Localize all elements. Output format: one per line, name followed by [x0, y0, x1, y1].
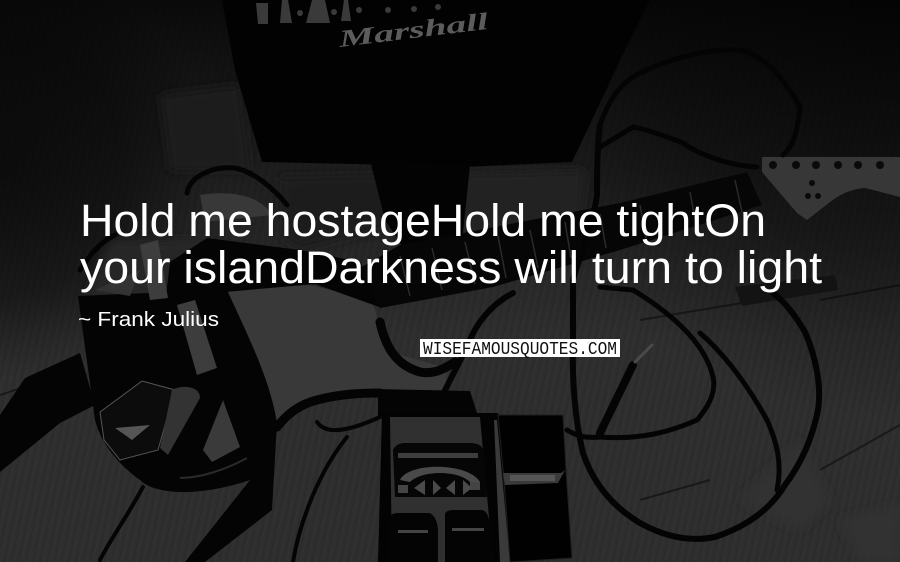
sticker badge on guitar [100, 381, 247, 478]
upper horn [165, 238, 382, 308]
quote text [80, 195, 823, 293]
guitar pickup [177, 300, 217, 375]
amp logo: Marshall [336, 9, 490, 53]
multi-effects pedal [378, 413, 510, 562]
quote text: your islandDarkness will turn to light [80, 242, 823, 293]
lower body [78, 290, 277, 562]
pedal display [398, 453, 480, 495]
shadow under pickguard [378, 389, 478, 416]
quote text: Hold me hostageHold me tightOn [80, 195, 766, 246]
amplifier [222, 0, 650, 246]
guitar neck [360, 172, 838, 308]
watermark badge: WISEFAMOUSQUOTES.COM [423, 340, 617, 360]
jack plug [600, 345, 652, 433]
guitar body [78, 157, 900, 562]
cables [80, 50, 819, 562]
amp control knobs [256, 0, 441, 24]
pickguard [225, 285, 447, 425]
guitar headstock [762, 157, 900, 220]
expression pedal [498, 415, 572, 562]
wedge between pedals [494, 420, 510, 562]
author attribution: ~ Frank Julius [78, 308, 219, 331]
guitar strap [0, 353, 95, 472]
foot switches [390, 510, 493, 562]
